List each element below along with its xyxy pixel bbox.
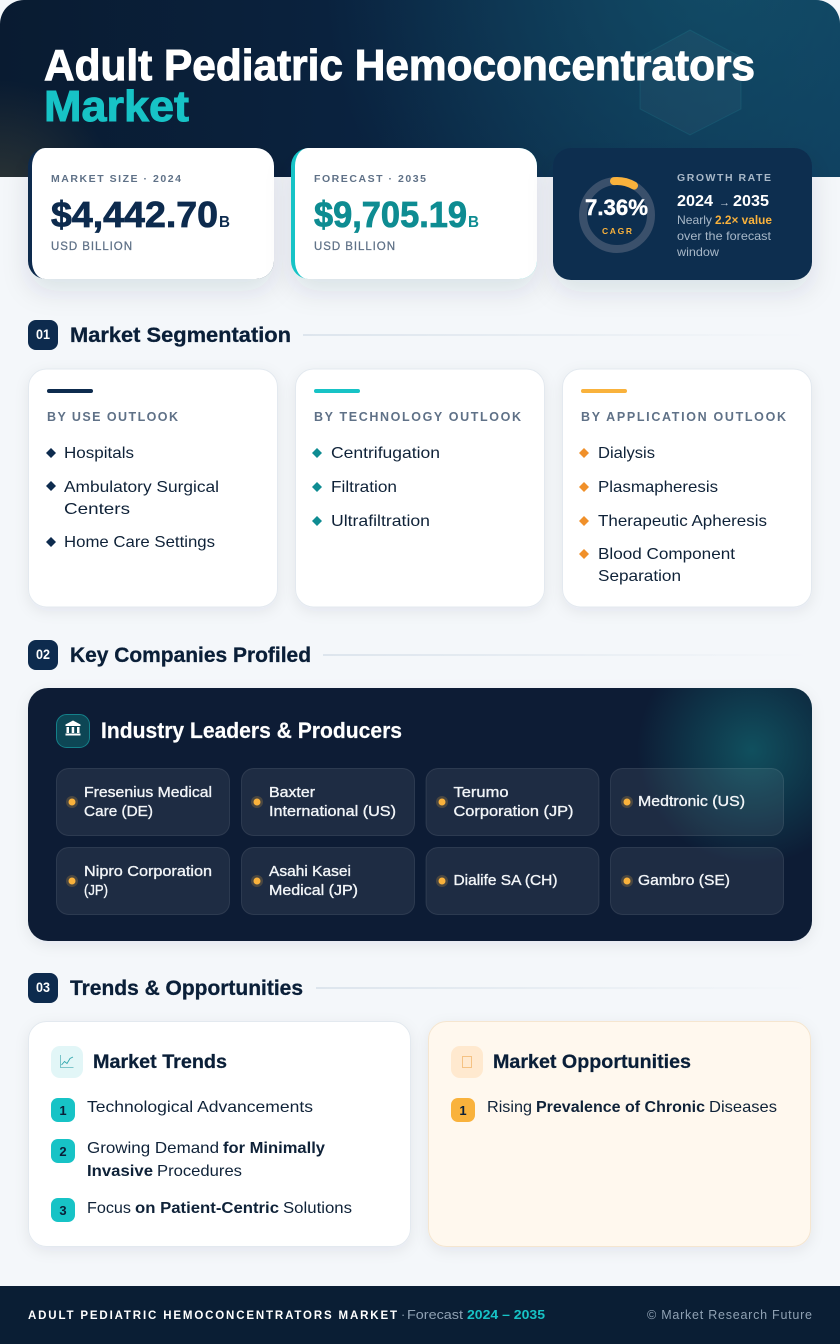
text: growth details: Nearly bbox=[677, 213, 712, 227]
panel: by application outlook: Blood Component bbox=[598, 546, 736, 563]
chart: CAGR ring bbox=[583, 181, 651, 249]
panel: by use outlook bbox=[28, 369, 278, 607]
panel: by use outlook: Home Care Settings bbox=[64, 534, 215, 551]
company: Nipro: (JP) bbox=[84, 882, 108, 899]
panel: industry leaders bbox=[28, 688, 812, 941]
company: Fresenius bbox=[56, 768, 230, 836]
panel: by technology outlook: Ultrafiltration bbox=[331, 513, 430, 530]
title bbox=[44, 41, 755, 131]
company: Fresenius: Care (DE) bbox=[84, 803, 153, 820]
company: Medtronic: Medtronic (US) bbox=[638, 793, 745, 810]
trend 3: 3 bbox=[59, 1203, 67, 1218]
panel: forecast: USD BILLION bbox=[314, 241, 395, 253]
panel: by application outlook: Dialysis bbox=[598, 445, 655, 462]
panel: market size: USD BILLION bbox=[51, 241, 132, 253]
company: Dialife: Dialife SA (CH) bbox=[454, 872, 558, 889]
text: growth details: window bbox=[676, 245, 719, 259]
chart: CAGR ring: 7.36% bbox=[585, 195, 648, 220]
icon: missing glyph box bbox=[451, 1046, 483, 1078]
trend 2 bbox=[51, 1139, 325, 1180]
panel: by use outlook: Hospitals bbox=[64, 445, 134, 462]
section heading: key companies: Key Companies Profiled bbox=[70, 644, 311, 667]
panel: by use outlook: Ambulatory Surgical bbox=[64, 479, 219, 496]
panel: forecast: $9,705.19 bbox=[314, 194, 467, 235]
panel: forecast: B bbox=[468, 214, 479, 231]
opportunity 1: 1 bbox=[459, 1103, 467, 1118]
panel heading: Market Trends bbox=[93, 1051, 227, 1073]
section heading: trends and opportunities: Trends & Opportunities bbox=[70, 977, 303, 1000]
opportunity 1: Prevalence of Chronic bbox=[536, 1099, 705, 1116]
panel: market size bbox=[28, 148, 274, 279]
footer: © Market Research Future bbox=[647, 1308, 812, 1322]
text: growth details: over the forecast bbox=[677, 229, 772, 243]
panel: by technology outlook: BY TECHNOLOGY OUTLOOK bbox=[314, 410, 521, 424]
trend 2: for Minimally bbox=[223, 1140, 325, 1157]
trend 3: Solutions bbox=[283, 1200, 352, 1217]
company: Asahi Kasei: Medical (JP) bbox=[269, 882, 358, 899]
panel: forecast: FORECAST · 2035 bbox=[314, 173, 426, 185]
company: Dialife bbox=[426, 848, 599, 914]
panel: by application outlook: BY APPLICATION OUTLOOK bbox=[581, 410, 786, 424]
company: Terumo bbox=[426, 768, 599, 836]
panel heading: Market Opportunities bbox=[493, 1051, 691, 1073]
text: growth details: 2024 bbox=[677, 193, 713, 210]
panel: forecast bbox=[291, 148, 537, 279]
opportunity 1 bbox=[451, 1098, 777, 1122]
section heading: market segmentation: 01 bbox=[36, 327, 50, 342]
panel: market size: MARKET SIZE · 2024 bbox=[51, 173, 181, 185]
text: growth details: 2.2× value bbox=[715, 213, 772, 227]
trend 2: 2 bbox=[59, 1144, 67, 1159]
footer: · bbox=[401, 1308, 405, 1322]
company: Baxter: Baxter bbox=[269, 784, 315, 801]
panel heading: Industry Leaders & Producers bbox=[101, 718, 402, 743]
company: Asahi Kasei: Asahi Kasei bbox=[269, 863, 351, 880]
trend 1 bbox=[51, 1098, 313, 1122]
icon: hexagon watermark bbox=[640, 30, 741, 135]
company: Gambro: Gambro (SE) bbox=[638, 872, 730, 889]
company: Nipro: Nipro Corporation bbox=[84, 863, 212, 880]
panel: market size: $4,442.70 bbox=[51, 194, 218, 235]
icon: bank building bbox=[56, 714, 90, 748]
trend 2: Invasive bbox=[87, 1163, 153, 1180]
title: Market bbox=[44, 82, 189, 131]
trend 3 bbox=[51, 1198, 352, 1222]
company: Nipro bbox=[56, 848, 230, 914]
section heading: trends and opportunities bbox=[28, 973, 812, 1003]
section heading: key companies bbox=[28, 640, 812, 670]
panel: by technology outlook: Filtration bbox=[331, 479, 397, 496]
section heading: trends and opportunities: 03 bbox=[36, 980, 50, 995]
company: Terumo: Corporation (JP) bbox=[454, 803, 574, 820]
trend 1: Technological Advancements bbox=[87, 1099, 313, 1116]
trend 2: Procedures bbox=[157, 1163, 242, 1180]
panel: by use outlook: Centers bbox=[64, 501, 130, 518]
icon: line chart bbox=[51, 1046, 83, 1078]
section heading: market segmentation: Market Segmentation bbox=[70, 324, 291, 347]
text: growth details: 2035 bbox=[733, 193, 769, 210]
panel: by use outlook: BY USE OUTLOOK bbox=[47, 410, 178, 424]
company: Asahi Kasei bbox=[242, 848, 414, 914]
panel: by application outlook: Therapeutic Apheresis bbox=[598, 513, 767, 530]
chart: CAGR ring: CAGR bbox=[602, 226, 632, 236]
company: Fresenius: Fresenius Medical bbox=[84, 784, 212, 801]
header band bbox=[0, 0, 840, 177]
text: growth details: GROWTH RATE bbox=[677, 172, 771, 184]
panel: growth rate bbox=[553, 148, 812, 280]
trend 3: Focus bbox=[87, 1200, 131, 1217]
trend 2: Growing Demand bbox=[87, 1140, 219, 1157]
panel: by technology outlook: Centrifugation bbox=[331, 445, 440, 462]
text: growth details bbox=[676, 172, 772, 259]
panel: market size: B bbox=[219, 214, 230, 231]
panel: market opportunities bbox=[428, 1022, 810, 1246]
trend 3: on Patient-Centric bbox=[135, 1200, 279, 1217]
section heading: key companies: 02 bbox=[36, 647, 50, 662]
company: Medtronic bbox=[610, 768, 784, 836]
company: Baxter bbox=[242, 768, 414, 836]
opportunity 1: Rising bbox=[487, 1099, 532, 1116]
panel: by technology outlook bbox=[296, 369, 544, 607]
company: Gambro bbox=[610, 848, 784, 914]
footer: ADULT PEDIATRIC HEMOCONCENTRATORS MARKET bbox=[28, 1310, 397, 1322]
panel: by application outlook: Plasmapheresis bbox=[598, 479, 718, 496]
panel: market trends bbox=[28, 1022, 410, 1246]
footer: Forecast bbox=[407, 1308, 464, 1322]
trend 1: 1 bbox=[59, 1103, 67, 1118]
panel: by application outlook bbox=[562, 369, 812, 607]
title: Adult Pediatric Hemoconcentrators bbox=[44, 41, 755, 90]
section heading: market segmentation bbox=[28, 320, 812, 350]
text: growth details: → bbox=[719, 197, 730, 209]
opportunity 1: Diseases bbox=[709, 1099, 777, 1116]
footer bbox=[0, 1286, 840, 1344]
footer: 2024 – 2035 bbox=[467, 1308, 545, 1322]
company: Terumo: Terumo bbox=[454, 784, 508, 801]
company: Baxter: International (US) bbox=[269, 803, 396, 820]
panel: by application outlook: Separation bbox=[598, 568, 681, 585]
